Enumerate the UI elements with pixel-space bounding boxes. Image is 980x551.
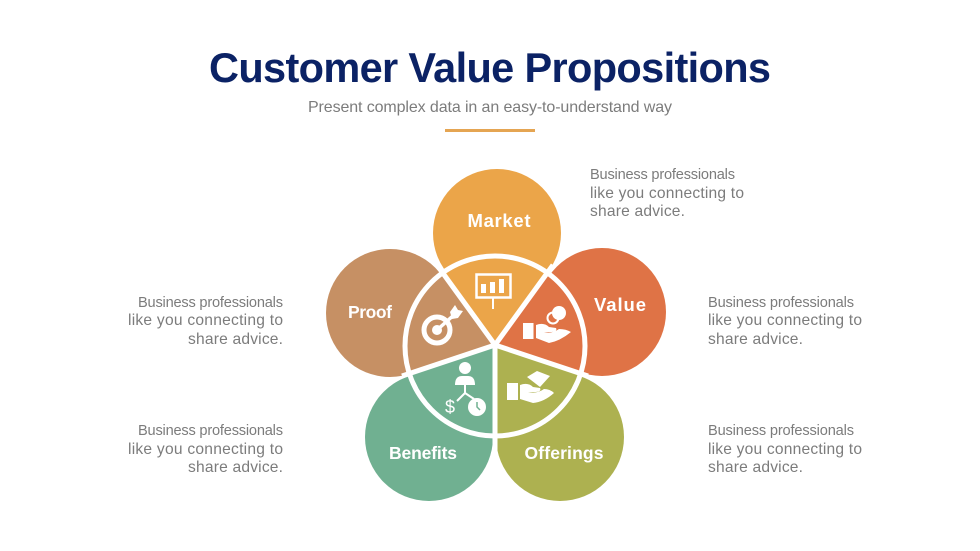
title: Customer Value Propositions bbox=[209, 44, 771, 91]
subtitle: Present complex data in an easy-to-understand way bbox=[308, 99, 672, 116]
petal: benefits bbox=[365, 345, 495, 501]
text: share advice. bbox=[590, 203, 685, 220]
text: share advice. bbox=[188, 331, 283, 348]
icon: hand with coin bbox=[523, 306, 571, 343]
text: share advice. bbox=[188, 459, 283, 476]
text block: market: Business professionals bbox=[590, 167, 735, 183]
icon: presentation chart bbox=[476, 274, 510, 309]
text: share advice. bbox=[708, 331, 803, 348]
label: proof: Proof bbox=[348, 302, 392, 322]
petal: market bbox=[433, 169, 561, 345]
label: offerings: Offerings bbox=[524, 443, 604, 463]
text: like you connecting to bbox=[128, 441, 283, 458]
icon: target with arrow bbox=[424, 305, 463, 343]
petal: proof bbox=[326, 249, 495, 377]
text block: proof: Business professionals bbox=[138, 295, 283, 311]
text block: offerings: Business professionals bbox=[708, 423, 854, 439]
text block: value: Business professionals bbox=[708, 295, 854, 311]
text: share advice. bbox=[708, 459, 803, 476]
text: like you connecting to bbox=[590, 185, 744, 202]
flower diagram bbox=[326, 169, 666, 505]
text: like you connecting to bbox=[708, 312, 862, 329]
petal: value bbox=[495, 248, 666, 376]
text block: benefits: Business professionals bbox=[138, 423, 283, 439]
icon: person with dollar and clock bbox=[445, 362, 486, 417]
icon: hand with diamond bbox=[507, 371, 554, 403]
text: like you connecting to bbox=[708, 441, 862, 458]
label: market: Market bbox=[468, 210, 530, 231]
label: benefits: Benefits bbox=[389, 443, 457, 463]
label: value: Value bbox=[594, 294, 646, 315]
text: like you connecting to bbox=[128, 312, 283, 329]
icon: person with dollar and clock: $ bbox=[445, 397, 455, 417]
accent underline bbox=[445, 129, 535, 132]
petal: offerings bbox=[495, 345, 624, 501]
ring and spokes bbox=[402, 256, 588, 505]
